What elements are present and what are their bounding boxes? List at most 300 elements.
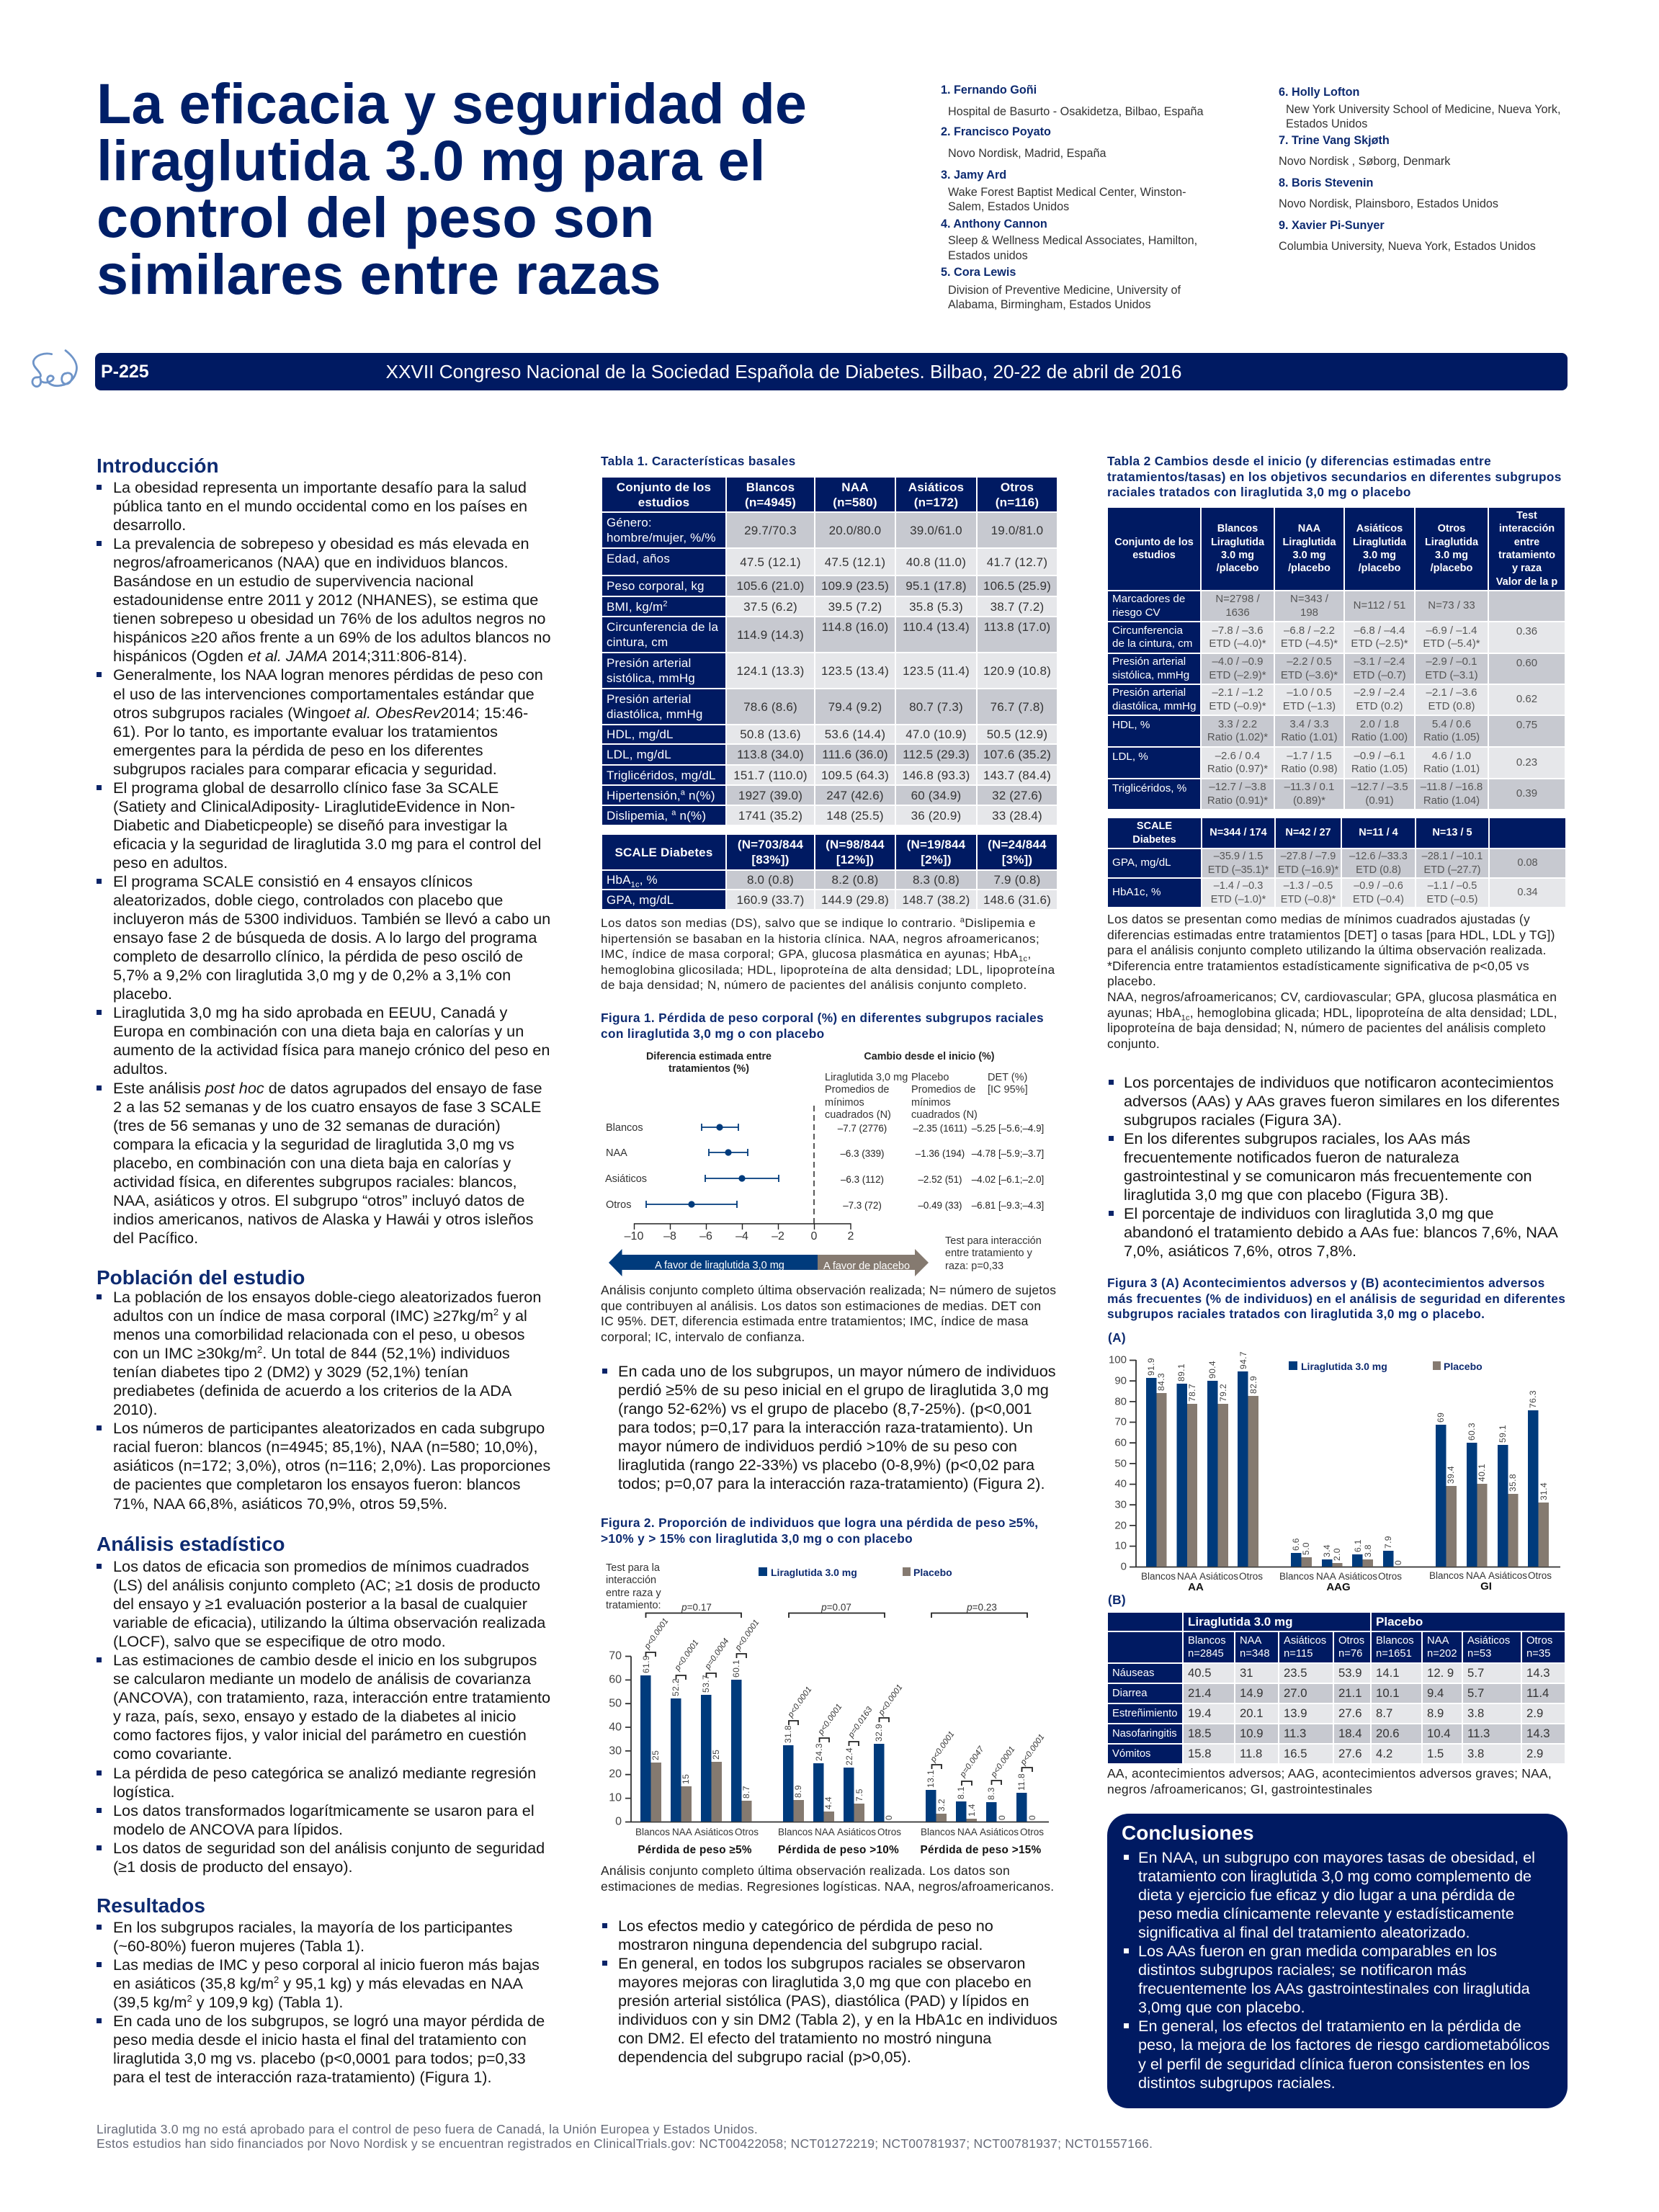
table: Tabla 2 changes from baseline: ETD (–2.9)* — [1209, 668, 1266, 681]
table: SCALE Diabetes changes: N=42 / 27 — [1285, 827, 1331, 838]
table: Tabla 1 baseline characteristics: 114.8 (16.0) — [822, 620, 888, 634]
text: adverse events bullets: abandonó el tratamiento debido a AAs fue: blancos 7,6%, NAA — [1124, 1223, 1558, 1241]
text: adverse events bullets: liraglutida 3,0 mg que con placebo (Figura 3B). — [1124, 1186, 1449, 1204]
table: Tabla 2 changes from baseline: 198 — [1300, 606, 1318, 618]
text: Introducción: adultos. — [113, 1060, 168, 1078]
text: Resultados: para el test de interacción raza-tratamiento) (Figura 1). — [113, 2068, 492, 2086]
text: Análisis estadístico: como covariante. — [113, 1745, 232, 1763]
table: Tabla 1 baseline characteristics: LDL, mg/dL — [607, 748, 671, 761]
text: adverse events bullets: frecuentemente notificados fueron de naturaleza — [1124, 1148, 1459, 1166]
authors: column 1: Alabama, Birmingham, Estados Unidos — [948, 298, 1151, 311]
table: Tabla 2 changes from baseline: 5.4 / 0.6 — [1432, 718, 1471, 730]
text: Análisis estadístico: (ANCOVA), con tratamiento, raza, interacción entre tratamiento — [113, 1688, 550, 1706]
table: SCALE Diabetes baseline: [3%]) — [1002, 853, 1032, 867]
footer: Liraglutida 3.0 mg no está aprobado para el control de peso fuera de Canadá, la Unión Europea y Estados Unidos. — [97, 2122, 758, 2136]
chart: Figura 2 bars: 40 — [609, 1721, 622, 1733]
table: Tabla 2 changes from baseline: sistólica, mmHg — [1112, 668, 1189, 681]
table: Figura 3B frequent adverse events: 40.5 — [1188, 1666, 1211, 1680]
text: Introducción: 61). Por lo tanto, es importante evaluar los tratamientos — [113, 722, 498, 740]
text: Introducción: indios americanos, nativos de Alaska y Hawái y otros isleños — [113, 1210, 533, 1228]
text: Análisis estadístico: modelo de ANCOVA para lípidos. — [113, 1820, 343, 1838]
authors: column 1: Salem, Estados Unidos — [948, 200, 1069, 213]
chart: Figura 2 bars: NAA — [957, 1827, 978, 1837]
text: Introducción — [97, 478, 551, 1247]
table: Figura 3B frequent adverse events: Otros — [1338, 1635, 1364, 1647]
table: Tabla 1 baseline characteristics: 40.8 (11.0) — [906, 555, 966, 569]
text: efficacy bullets: individuos con y sin DM2 (Tabla 2), y en la HbA1c en individuos — [618, 2010, 1057, 2028]
table: Figura 3B frequent adverse events: n=35 — [1526, 1648, 1550, 1660]
text: Introducción: La prevalencia de sobrepeso y obesidad es más elevada en — [113, 534, 529, 552]
table: Tabla 1 baseline characteristics: NAA — [841, 480, 869, 494]
table: Tabla 2 changes from baseline: Presión arterial — [1112, 655, 1186, 668]
table: SCALE Diabetes changes: ETD (–35.1)* — [1208, 864, 1269, 876]
chart: Figura 2 bars: p<0.0001 — [786, 1685, 814, 1720]
title: similares entre razas — [97, 242, 661, 306]
text: weight loss bullet: mayor número de individuos perdió >10% de su peso con — [618, 1437, 1017, 1455]
chart: Figura 2 bars: NAA — [672, 1827, 692, 1837]
heading: Tabla 1: Tabla 1. Características basales — [601, 454, 796, 468]
chart: Figura 2 bars: 10 — [609, 1792, 622, 1804]
chart: Figura 1 forest plot — [605, 1051, 1044, 1276]
chart: Figura 1 forest plot: –7.7 (2776) — [838, 1123, 887, 1134]
table: SCALE Diabetes changes: –12.6 /–33.3 — [1349, 851, 1408, 862]
chart: Figura 1 forest plot: cuadrados (N) — [911, 1109, 978, 1121]
table: Tabla 2 changes from baseline: 0.60 — [1516, 657, 1537, 669]
text: efficacy bullets: mayores mejoras con liraglutida 3,0 mg que con placebo en — [618, 1973, 1032, 1991]
table: Tabla 1 baseline characteristics: 78.6 (8.6) — [743, 700, 797, 713]
text: conclusions — [1124, 1848, 1550, 2092]
chart: Figura 2 bars: 8.7 — [741, 1786, 751, 1799]
text: Análisis estadístico — [97, 1557, 550, 1876]
poster number: P-225 — [101, 362, 149, 382]
table: Tabla 1 baseline characteristics: 80.7 (7.3) — [909, 700, 963, 713]
chart: Figura 2 bars: 31.8 — [783, 1725, 793, 1743]
table: Tabla 2 changes from baseline: /placebo — [1359, 563, 1400, 574]
chart: Figura 1 forest plot: cuadrados (N) — [825, 1109, 891, 1121]
text: Introducción: NAA, asiáticos y otros. El subgrupo “otros” incluyó datos de — [113, 1191, 524, 1209]
table: Figura 3B frequent adverse events: 20.1 — [1240, 1706, 1263, 1720]
banner — [95, 353, 1568, 390]
table: Tabla 1 baseline characteristics: BMI, kg/m2 — [607, 599, 668, 614]
table: SCALE Diabetes baseline: 148.6 (31.6) — [983, 893, 1051, 906]
chart: Figura 2 bars: p<0.0001 — [643, 1617, 671, 1652]
text: Introducción: placebo. — [113, 985, 172, 1003]
text: Introducción: Este análisis post hoc de datos agrupados del ensayo de fase — [113, 1079, 542, 1096]
authors: column 1: Estados unidos — [948, 249, 1028, 262]
authors: column 1: Division of Preventive Medicine, University of — [948, 284, 1181, 297]
table: Tabla 2 changes from baseline: 0.75 — [1516, 719, 1537, 731]
table: Figura 3B frequent adverse events: 10.1 — [1376, 1686, 1400, 1700]
title: control del peso son — [97, 185, 654, 249]
table: Tabla 1 baseline characteristics — [602, 478, 1057, 825]
text: Población del estudio: racial fueron: blancos (n=4945; 85,1%), NAA (n=580; 10,0%), — [113, 1438, 538, 1456]
text: efficacy bullets: presión arterial sistólica (PAS), diastólica (PAD) y lípidos en — [618, 1992, 1029, 2010]
table: SCALE Diabetes changes: ETD (–0.5) — [1427, 893, 1477, 905]
text: Introducción: La obesidad representa un importante desafío para la salud — [113, 478, 527, 496]
text: Análisis estadístico: (LS) del análisis conjunto completo (AC; ≥1 dosis de producto — [113, 1576, 540, 1594]
table: Tabla 2 changes from baseline: 3.0 mg — [1435, 550, 1468, 561]
chart: Figura 2 bars: interacción — [606, 1575, 656, 1586]
chart: Figura 1 forest plot: Placebo — [911, 1072, 949, 1083]
chart: Figura 3A adverse events bars: 39.4 — [1446, 1466, 1456, 1484]
chart: Figura 3A adverse events bars: Liraglutida 3.0 mg — [1301, 1361, 1387, 1372]
table: SCALE Diabetes changes: N=13 / 5 — [1432, 827, 1472, 838]
table: Figura 3B frequent adverse events: Placebo — [1376, 1615, 1423, 1628]
title — [97, 71, 807, 306]
chart: Figura 2 bars: Otros — [877, 1827, 901, 1837]
table: Figura 3B frequent adverse events: Náuseas — [1112, 1667, 1154, 1679]
text: efficacy bullets: con DM2. El efecto del tratamiento no mostró ninguna — [618, 2029, 991, 2047]
table: Tabla 2 changes from baseline: 0.36 — [1516, 625, 1537, 637]
table: SCALE Diabetes changes: ETD (–16.9)* — [1278, 864, 1338, 876]
table: Tabla 1 baseline characteristics: Dislipemia, a n(%) — [607, 808, 706, 823]
chart: Figura 2 bars: Pérdida de peso >10% — [778, 1844, 899, 1856]
text: weight loss bullet: todos; p=0,07 para la interacción raza-tratamiento) (Figura 2). — [618, 1474, 1045, 1492]
footer: Estos estudios han sido financiados por Novo Nordisk y se encuentran registrados en ClinicalTrials.gov: NCT00422058; NCT01272219; NCT00781937; NCT00781937; NCT01557166. — [97, 2136, 1153, 2151]
table: Figura 3B frequent adverse events: 14.3 — [1526, 1727, 1550, 1740]
chart: Figura 2 bars: 0 — [997, 1815, 1007, 1820]
chart: Figura 3A adverse events bars: 35.8 — [1508, 1474, 1518, 1492]
table: Tabla 2 changes from baseline: 3.0 mg — [1293, 550, 1325, 561]
chart: Figura 1 forest plot: A favor de placebo — [823, 1261, 910, 1272]
chart: Figura 2 bars: 25 — [650, 1750, 661, 1760]
table: Figura 3B frequent adverse events: 27.6 — [1338, 1747, 1361, 1760]
table: SCALE Diabetes baseline: [83%]) — [751, 853, 790, 867]
authors: column 2: 9. Xavier Pi-Sunyer — [1279, 219, 1385, 232]
chart: Figura 2 bars: 61.9 — [641, 1655, 651, 1673]
table: Tabla 1 baseline characteristics: 107.6 (35.2) — [983, 748, 1051, 761]
text: Población del estudio: con un IMC ≥30kg/m2. Un total de 844 (52,1%) individuos — [113, 1344, 510, 1362]
table: Tabla 1 baseline characteristics: 109.9 (23.5) — [821, 579, 889, 593]
table: Tabla 2 changes from baseline: /placebo — [1431, 563, 1472, 574]
table: Tabla 2 changes from baseline: Liraglutida — [1211, 537, 1264, 548]
panel: conclusions — [1107, 1814, 1568, 2108]
chart: Figura 3A adverse events bars: 50 — [1114, 1458, 1127, 1469]
table: SCALE Diabetes changes: 0.08 — [1517, 857, 1538, 869]
table: Tabla 2 changes from baseline: Presión arterial — [1112, 686, 1186, 699]
chart: Figura 2 bars: 24.3 — [814, 1743, 824, 1761]
table: Figura 3B frequent adverse events: 23.5 — [1284, 1666, 1307, 1680]
table: Tabla 1 baseline characteristics: 60 (34.9) — [911, 788, 961, 802]
text: conclusions: distintos subgrupos raciales. — [1138, 2074, 1336, 2092]
table: Figura 3B frequent adverse events: 15.8 — [1188, 1747, 1211, 1760]
table: Tabla 1 baseline characteristics: cintura, cm — [607, 635, 668, 649]
table: Tabla 1 baseline characteristics: 123.5 (11.4) — [903, 664, 970, 677]
table: Figura 3B frequent adverse events: 53.9 — [1338, 1666, 1361, 1680]
chart: Figura 1 forest plot: raza: p=0,33 — [945, 1261, 1003, 1272]
text: conclusions: peso media clínicamente relevante y estadísticamente — [1138, 1904, 1514, 1922]
footer — [97, 2122, 1153, 2151]
text: Población del estudio: tenían diabetes tipo 2 (DM2) y 3029 (52,1%) tenían — [113, 1363, 468, 1381]
text: Análisis estadístico: se calcularon mediante un modelo de análisis de covarianza — [113, 1670, 531, 1688]
table: Tabla 2 changes from baseline: –2.9 / –0.1 — [1426, 655, 1477, 668]
text: Resultados — [97, 1918, 545, 2086]
chart: Figura 2 bars: Otros — [1020, 1827, 1044, 1837]
text: adverse events bullets: En los diferentes subgrupos raciales, los AAs más — [1124, 1129, 1470, 1147]
text: Resultados: en asiáticos (35,8 kg/m2 y 95,1 kg) y más elevadas en NAA — [113, 1974, 523, 1992]
note: Tabla 1 — [601, 915, 1055, 992]
table: Tabla 1 baseline characteristics: 20.0/80.0 — [829, 523, 881, 537]
table: Tabla 2 changes from baseline: de la cintura, cm — [1112, 637, 1192, 650]
table: SCALE Diabetes baseline: 8.2 (0.8) — [831, 873, 879, 887]
table: SCALE Diabetes baseline: 148.7 (38.2) — [902, 893, 970, 906]
chart: Figura 3A adverse events bars: 3.4 — [1322, 1544, 1332, 1557]
table: Tabla 1 baseline characteristics: 41.7 (12.7) — [987, 555, 1047, 569]
chart: Figura 1 forest plot: Promedios de — [911, 1084, 975, 1096]
table: Tabla 1 baseline characteristics: (n=116) — [996, 496, 1039, 509]
table: Figura 3B frequent adverse events: 16.5 — [1284, 1747, 1307, 1760]
table: Tabla 2 changes from baseline: diastólica, mmHg — [1112, 700, 1196, 712]
table: Figura 3B frequent adverse events: 11.8 — [1240, 1747, 1262, 1760]
table: Tabla 2 changes from baseline: –2.9 / –2.4 — [1354, 686, 1405, 699]
table: Tabla 2 changes from baseline: Circunferencia — [1112, 624, 1183, 637]
table: SCALE Diabetes changes: N=344 / 174 — [1209, 827, 1267, 838]
table: Tabla 1 baseline characteristics: Peso corporal, kg — [607, 579, 705, 593]
text: conclusions: tratamiento con liraglutida 3,0 mg como complemento de — [1138, 1867, 1531, 1885]
text: Resultados: Las medias de IMC y peso corporal al inicio fueron más bajas — [113, 1956, 540, 1974]
text: Introducción: subgrupos raciales para comparar eficacia y seguridad. — [113, 760, 497, 778]
table: Figura 3B frequent adverse events: Asiáticos — [1284, 1635, 1326, 1647]
table: Tabla 2 changes from baseline: –6.8 / –4.4 — [1354, 624, 1405, 637]
icon: SED logo — [32, 349, 78, 388]
chart: Figura 2 bars: 8.1 — [956, 1786, 966, 1799]
table: Tabla 2 changes from baseline: 3.0 mg — [1221, 550, 1254, 561]
chart: Figura 1 forest plot: –6 — [699, 1230, 712, 1242]
chart: Figura 3A adverse events bars: 5.0 — [1301, 1542, 1311, 1555]
text: conclusions: Los AAs fueron en gran medida comparables en los — [1138, 1942, 1497, 1960]
chart: Figura 2 bars: Pérdida de peso ≥5% — [638, 1844, 752, 1856]
note: Figura 3: AA, acontecimientos adversos; AAG, acontecimientos adversos graves; NAA, — [1107, 1766, 1552, 1781]
chart: Figura 1 forest plot: –5.25 [–5.6;–4.9] — [972, 1123, 1044, 1134]
table: Tabla 1 baseline characteristics: 1741 (35.2) — [738, 808, 802, 823]
text: Introducción: negros/afroamericanos (NAA) que en individuos blancos. — [113, 553, 509, 571]
text: weight loss bullet: liraglutida (rango 22-33%) vs placebo (0-8,9%) (p<0,02 para — [618, 1456, 1034, 1474]
table: Tabla 2 changes from baseline: Marcadores de — [1112, 593, 1185, 605]
table: Tabla 1 baseline characteristics: Blancos — [746, 480, 795, 494]
table: Tabla 1 baseline characteristics: 114.9 (14.3) — [737, 628, 804, 641]
table: SCALE Diabetes baseline: GPA, mg/dL — [607, 893, 674, 906]
table: Figura 3B frequent adverse events: 13.9 — [1284, 1706, 1307, 1720]
table: Tabla 2 changes from baseline: entre — [1514, 537, 1539, 548]
authors: column 2: Novo Nordisk, Plainsboro, Estados Unidos — [1279, 197, 1498, 210]
table: Tabla 2 changes from baseline: ETD (–2.5)* — [1351, 637, 1408, 650]
table: Figura 3B frequent adverse events: 14.9 — [1240, 1686, 1263, 1700]
authors: column 1: 5. Cora Lewis — [941, 266, 1016, 279]
table: Tabla 1 baseline characteristics: 247 (42.6) — [826, 788, 884, 802]
table: Tabla 2 changes from baseline: ETD (–5.4)* — [1423, 637, 1480, 650]
text: Resultados: (~60-80%) fueron mujeres (Tabla 1). — [113, 1937, 365, 1955]
heading: Figura 2: >10% y > 15% con liraglutida 3,0 mg o con placebo — [601, 1531, 913, 1546]
table: Figura 3B frequent adverse events: 27.0 — [1284, 1686, 1307, 1700]
table: Figura 3B frequent adverse events: 21.1 — [1338, 1686, 1361, 1700]
text: Introducción: compara la eficacia y la seguridad de liraglutida 3,0 mg vs — [113, 1135, 514, 1153]
chart: Figura 2 bars: 13.1 — [926, 1770, 936, 1788]
table: SCALE Diabetes baseline: 160.9 (33.7) — [736, 893, 805, 906]
table: Tabla 1 baseline characteristics: HDL, mg/dL — [607, 727, 674, 741]
table: Tabla 2 changes from baseline: Liraglutida — [1353, 537, 1406, 548]
table: Tabla 1 baseline characteristics: 39.0/61.0 — [910, 523, 962, 537]
table: Tabla 1 baseline characteristics: 32 (27.6) — [992, 788, 1042, 802]
table: Tabla 2 changes from baseline: ETD (–1.3) — [1283, 700, 1336, 712]
chart: Figura 3A adverse events bars: NAA — [1466, 1570, 1486, 1581]
chart: Figura 1 forest plot: –6.81 [–9.3;–4.3] — [972, 1200, 1044, 1211]
table: Figura 3B frequent adverse events: n=53 — [1467, 1648, 1491, 1660]
chart: Figura 1 forest plot: –4 — [735, 1230, 748, 1242]
table: SCALE Diabetes baseline: 7.9 (0.8) — [993, 873, 1041, 887]
table: Tabla 2 changes from baseline — [1108, 508, 1565, 809]
chart: Figura 1 forest plot: Otros — [606, 1199, 631, 1211]
text: adverse events bullets: El porcentaje de individuos con liraglutida 3,0 mg que — [1124, 1204, 1494, 1222]
text: conclusions: distintos subgrupos raciales; se notificaron más — [1138, 1961, 1467, 1979]
table: Tabla 1 baseline characteristics: 19.0/81.0 — [991, 523, 1043, 537]
heading: Conclusiones: Conclusiones — [1122, 1822, 1254, 1844]
table: Tabla 1 baseline characteristics: Otros — [1001, 480, 1034, 494]
chart: Figura 2 bars: 53.7 — [701, 1675, 711, 1693]
table: Tabla 2 changes from baseline: –11.8 / –16.8 — [1421, 781, 1483, 793]
table: Tabla 2 changes from baseline: NAA — [1298, 523, 1320, 534]
chart: Figura 3A adverse events bars: Asiáticos — [1199, 1571, 1238, 1582]
table: Tabla 1 baseline characteristics: (n=172) — [914, 496, 958, 509]
table: Tabla 2 changes from baseline: Otros — [1438, 523, 1465, 534]
table: Tabla 2 changes from baseline: Test — [1516, 510, 1537, 521]
text: Introducción: aumento de la actividad física para manejo crónico del peso en — [113, 1041, 550, 1059]
chart: Figura 2 bars: Asiáticos — [980, 1827, 1019, 1837]
chart: Figura 1 forest plot: –4.02 [–6.1;–2.0] — [972, 1174, 1044, 1185]
authors: column 1: Novo Nordisk, Madrid, España — [948, 147, 1106, 160]
text: Análisis estadístico: del ensayo y ≥1 evaluación posterior a la basal de cualquier — [113, 1595, 527, 1613]
table: Figura 3B frequent adverse events: 18.4 — [1338, 1727, 1361, 1740]
text: efficacy bullets: En general, en todos los subgrupos raciales se observaron — [618, 1954, 1025, 1972]
chart: Figura 2 bars: p<0.0001 — [929, 1730, 957, 1765]
table: Tabla 1 baseline characteristics: 151.7 (110.0) — [733, 768, 808, 782]
heading: Análisis estadístico: Análisis estadístico — [97, 1533, 285, 1555]
table: Figura 3B frequent adverse events: n=76 — [1338, 1648, 1362, 1660]
text: adverse events bullets: Los porcentajes de individuos que notificaron acontecimientos — [1124, 1073, 1554, 1091]
text: Análisis estadístico: Los datos de seguridad son del análisis conjunto de seguridad — [113, 1839, 545, 1857]
text: efficacy bullets: dependencia del subgrupo racial (p>0,05). — [618, 2048, 911, 2066]
table: Tabla 2 changes from baseline: (0.89)* — [1293, 794, 1325, 807]
table: Tabla 2 changes from baseline: N=112 / 51 — [1354, 599, 1405, 612]
table: Figura 3B frequent adverse events: n=115 — [1284, 1648, 1313, 1660]
chart: Figura 2 bars: 15 — [681, 1774, 691, 1784]
table: SCALE Diabetes changes: –27.8 / –7.9 — [1281, 851, 1336, 862]
table: SCALE Diabetes changes: GPA, mg/dL — [1112, 856, 1171, 869]
table: Tabla 2 changes from baseline: 1636 — [1225, 606, 1250, 618]
chart: Figura 1 forest plot: –8 — [663, 1230, 676, 1242]
table: SCALE Diabetes changes: N=11 / 4 — [1359, 827, 1398, 838]
heading: Figura 2: Figura 2. Proporción de individuos que logra una pérdida de peso ≥5%, — [601, 1515, 1038, 1530]
note: Tabla 1: de baja densidad; N, número de pacientes del análisis conjunto completo. — [601, 978, 1027, 992]
table: SCALE Diabetes changes: –0.9 / –0.6 — [1354, 880, 1403, 892]
authors: column 2: Columbia University, Nueva York, Estados Unidos — [1279, 240, 1536, 253]
authors: column 1: Sleep & Wellness Medical Associates, Hamilton, — [948, 234, 1197, 247]
chart: Figura 2 bars — [606, 1562, 1049, 1856]
chart: Figura 1 forest plot: –1.36 (194) — [916, 1148, 965, 1159]
table: Tabla 2 changes from baseline: Ratio (0.98) — [1281, 763, 1338, 775]
table: Figura 3B frequent adverse events: n=202 — [1427, 1648, 1457, 1660]
table: Tabla 2 changes from baseline: Ratio (0.91)* — [1207, 794, 1268, 807]
table: Tabla 2 changes from baseline: Ratio (1.05) — [1351, 763, 1408, 775]
table: SCALE Diabetes changes: –1.4 / –0.3 — [1214, 880, 1263, 892]
authors: column 1 — [941, 84, 1204, 311]
text: efficacy bullets: mostraron ninguna dependencia del subgrupo racial. — [618, 1935, 983, 1953]
chart: Figura 3A adverse events bars: 100 — [1109, 1354, 1127, 1366]
chart: Figura 2 bars: 70 — [609, 1649, 622, 1662]
table: Tabla 1 baseline characteristics: estudios — [638, 496, 689, 509]
table: Figura 3B frequent adverse events: 21.4 — [1188, 1686, 1211, 1700]
heading: Tabla 2: tratamientos/tasas) en los objetivos secundarios en diferentes subgrupos — [1107, 470, 1562, 484]
note: Tabla 2: para el análisis conjunto completo utilizando la última observación realizada. — [1107, 943, 1547, 957]
table: Tabla 1 baseline characteristics: 109.5 (64.3) — [821, 768, 889, 782]
text: Introducción: el uso de las intervenciones comportamentales estándar que — [113, 685, 535, 703]
text: weight loss bullet: (rango 52-62%) vs el grupo de placebo (8,7-25%). (p<0,001 — [618, 1400, 1032, 1418]
chart: Figura 3A adverse events bars: Otros — [1378, 1571, 1402, 1582]
table: Tabla 2 changes from baseline: ETD (–0.9)* — [1209, 700, 1266, 712]
table: Figura 3B frequent adverse events: 8.9 — [1427, 1706, 1444, 1720]
table: Tabla 2 changes from baseline: –7.8 / –3.6 — [1212, 624, 1263, 637]
chart: Figura 2 bars: 11.8 — [1016, 1773, 1027, 1791]
table: SCALE Diabetes changes: HbA1c, % — [1112, 886, 1161, 898]
table: Tabla 2 changes from baseline: LDL, % — [1112, 751, 1148, 763]
table: Tabla 2 changes from baseline: riesgo CV — [1112, 606, 1161, 618]
chart: Figura 2 bars: 4.4 — [823, 1796, 833, 1809]
table: Figura 3B frequent adverse events: 9.4 — [1427, 1686, 1444, 1700]
chart: Figura 1 forest plot: Asiáticos — [605, 1173, 647, 1185]
note: Tabla 2 — [1107, 912, 1557, 1051]
chart: Figura 3A adverse events bars: 40.1 — [1477, 1464, 1487, 1482]
table: SCALE Diabetes baseline: [2%]) — [921, 853, 952, 867]
text: Resultados: (39,5 kg/m2 y 109,9 kg) (Tabla 1). — [113, 1993, 343, 2011]
table: Tabla 1 baseline characteristics: 79.4 (9.2) — [828, 700, 882, 713]
text: Introducción: Basándose en un estudio de supervivencia nacional — [113, 572, 473, 590]
table: Tabla 2 changes from baseline: Asiáticos — [1356, 523, 1403, 534]
table: SCALE Diabetes baseline: (N=24/844 — [988, 838, 1047, 851]
text: Introducción: 5,7% a 9,2% con liraglutida 3,0 mg y de 0,2% a 3,1% con — [113, 966, 511, 984]
table: SCALE Diabetes changes: –28.1 / –10.1 — [1422, 851, 1483, 862]
text: Introducción: Generalmente, los NAA logran menores pérdidas de peso con — [113, 666, 543, 684]
table: Tabla 1 baseline characteristics: 39.5 (7.2) — [828, 599, 882, 614]
note: Figura 3 — [1107, 1766, 1552, 1797]
authors: column 1: Wake Forest Baptist Medical Center, Winston- — [948, 186, 1186, 199]
label: panel B: (B) — [1108, 1593, 1126, 1607]
table: Figura 3B frequent adverse events: 3.8 — [1467, 1747, 1484, 1760]
text: Población del estudio: Los números de participantes aleatorizados en cada subgrupo — [113, 1419, 545, 1437]
chart: Figura 1 forest plot: –2 — [772, 1230, 784, 1242]
table: Tabla 2 changes from baseline: ETD (–0.7) — [1353, 668, 1406, 681]
chart: Figura 1 forest plot: A favor de liraglutida 3,0 mg — [655, 1260, 784, 1271]
table: Tabla 1 baseline characteristics: 148 (25.5) — [826, 808, 884, 823]
text: Introducción: pública tanto en el mundo occidental como en los países en — [113, 497, 527, 515]
table: Figura 3B frequent adverse events: n=1651 — [1376, 1648, 1412, 1660]
chart: Figura 3A adverse events bars: Otros — [1239, 1571, 1263, 1582]
table: Tabla 2 changes from baseline: Ratio (1.05) — [1423, 731, 1480, 743]
table: Figura 3B frequent adverse events: 31 — [1240, 1666, 1253, 1680]
text: Introducción: actividad física, en diferentes subgrupos raciales: blancos, — [113, 1173, 517, 1191]
text: Análisis estadístico: y raza, país, sexo, ensayo y estado de la diabetes al inicio — [113, 1707, 516, 1725]
heading: Figura 3: más frecuentes (% de individuos) en el análisis de seguridad en diferentes — [1107, 1291, 1565, 1305]
chart: Figura 2 bars: Test para la — [606, 1562, 661, 1574]
text: Introducción: peso en adultos. — [113, 854, 228, 872]
chart: Figura 3A adverse events bars: GI — [1480, 1580, 1492, 1593]
chart: Figura 3A adverse events bars: 7.9 — [1383, 1536, 1393, 1549]
chart: Figura 1 forest plot: Diferencia estimada entre — [646, 1051, 772, 1062]
table: Tabla 1 baseline characteristics: Edad, años — [607, 552, 670, 565]
table: SCALE Diabetes baseline: 8.3 (0.8) — [913, 873, 960, 887]
table: Tabla 2 changes from baseline: ETD (–4.0)* — [1209, 637, 1266, 650]
table: SCALE Diabetes changes: SCALE — [1137, 820, 1172, 832]
text: Introducción: 2 a las 52 semanas y de los cuatro ensayos de fase 3 SCALE — [113, 1098, 541, 1116]
chart: Figura 2 bars: 0 — [884, 1815, 894, 1820]
